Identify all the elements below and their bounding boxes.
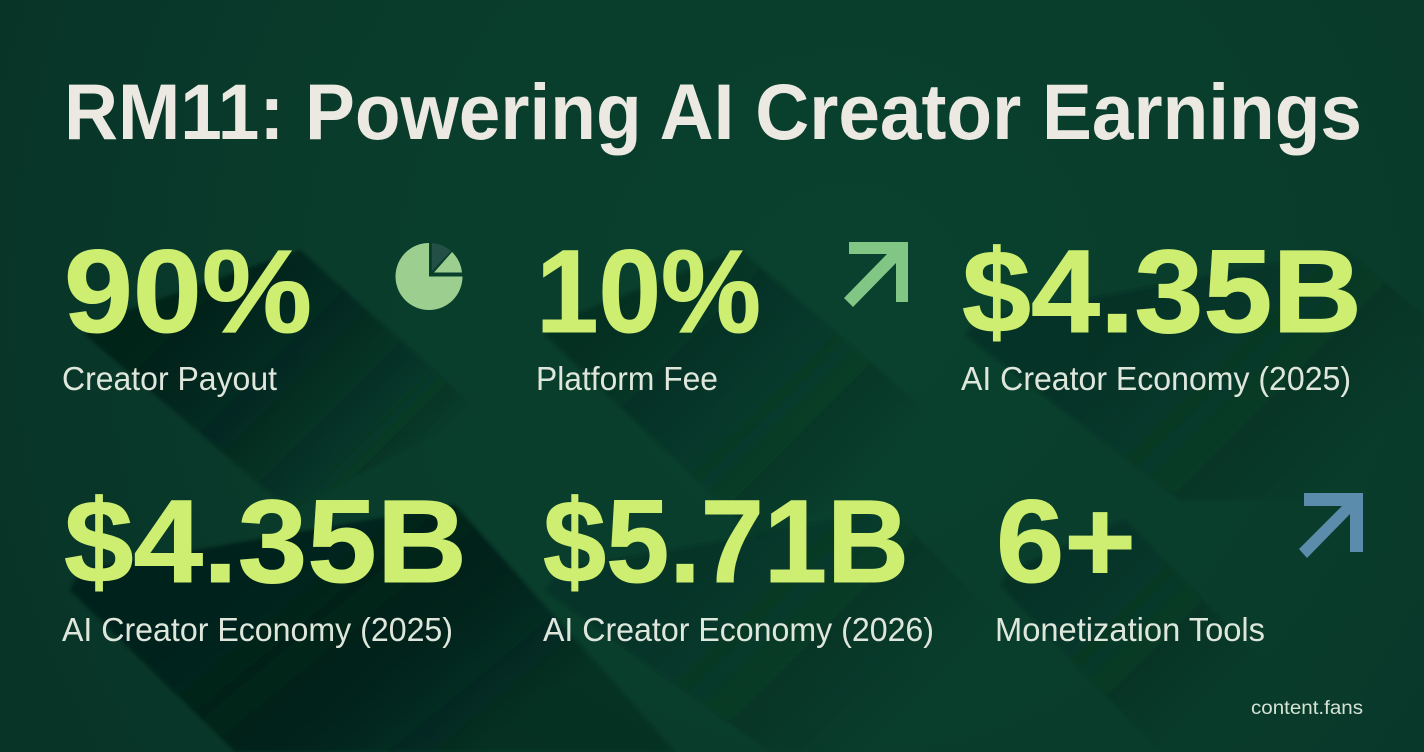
stat: 90% creator payout: 90% xyxy=(64,226,312,358)
stat: 90% creator payout: Creator Payout xyxy=(62,360,277,397)
stat: 6+ monetization tools: 6+ xyxy=(996,476,1136,608)
icon: blue up-right arrow xyxy=(1299,493,1363,558)
stat: $4.35B AI creator economy 2025 (second row): AI Creator Economy (2025) xyxy=(62,611,453,648)
stat: $4.35B AI creator economy 2025: $4.35B xyxy=(962,226,1362,358)
icon: pie chart xyxy=(396,243,462,310)
stat: $4.35B AI creator economy 2025: AI Creator Economy (2025) xyxy=(961,360,1351,397)
stat: 10% platform fee: 10% xyxy=(536,226,761,358)
stat: 6+ monetization tools xyxy=(995,476,1265,648)
long diagonal shadows xyxy=(70,250,1424,752)
stat: $5.71B AI creator economy 2026: $5.71B xyxy=(543,476,909,608)
stat: $4.35B AI creator economy 2025 (second row): $4.35B xyxy=(64,476,467,608)
stat: 6+ monetization tools: Monetization Tools xyxy=(995,611,1265,648)
title: RM11: Powering AI Creator Earnings xyxy=(64,67,1362,156)
footer credit: content.fans xyxy=(1251,698,1363,719)
stat: 10% platform fee: Platform Fee xyxy=(536,360,718,397)
icon: green up-right arrow xyxy=(844,242,908,307)
stat: $5.71B AI creator economy 2026: AI Creator Economy (2026) xyxy=(543,611,934,648)
